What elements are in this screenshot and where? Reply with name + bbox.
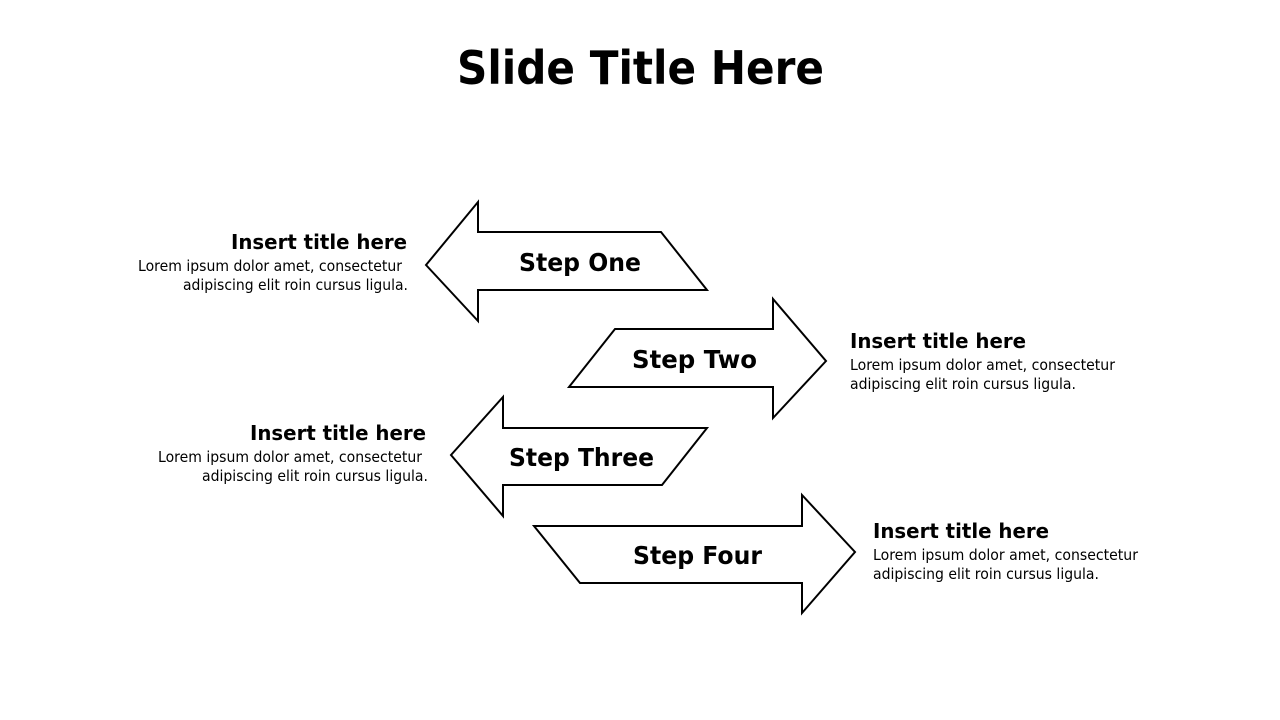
text block: step two: Insert title here	[850, 329, 1026, 353]
arrow: step four: Step Four	[633, 541, 763, 570]
text block: step three: Insert title here	[250, 421, 426, 445]
text block: step two	[850, 329, 1116, 393]
arrow: step one	[426, 202, 707, 321]
text block: step one: Insert title here	[231, 230, 407, 254]
text block: step four: Lorem ipsum dolor amet, consectetur	[873, 546, 1139, 564]
text block: step two: Lorem ipsum dolor amet, consectetur	[850, 356, 1116, 374]
arrow: step two	[569, 299, 826, 418]
text block: step one: adipiscing elit roin cursus ligula.	[183, 276, 408, 294]
text block: step four	[873, 519, 1139, 583]
arrow: step three: Step Three	[509, 443, 654, 472]
arrow: step one: Step One	[519, 248, 641, 277]
text block: step four: Insert title here	[873, 519, 1049, 543]
text block: step three: Lorem ipsum dolor amet, consectetur	[158, 448, 423, 466]
text block: step one: Lorem ipsum dolor amet, consectetur	[138, 257, 403, 275]
text block: step four: adipiscing elit roin cursus ligula.	[873, 565, 1099, 583]
text block: step one	[138, 230, 408, 294]
title: Slide Title Here	[457, 41, 824, 95]
arrow: step three	[451, 397, 707, 516]
arrow: step two: Step Two	[632, 345, 757, 374]
text block: step two: adipiscing elit roin cursus ligula.	[850, 375, 1076, 393]
text block: step three: adipiscing elit roin cursus ligula.	[202, 467, 428, 485]
arrow: step four	[534, 495, 855, 613]
text block: step three	[158, 421, 428, 485]
